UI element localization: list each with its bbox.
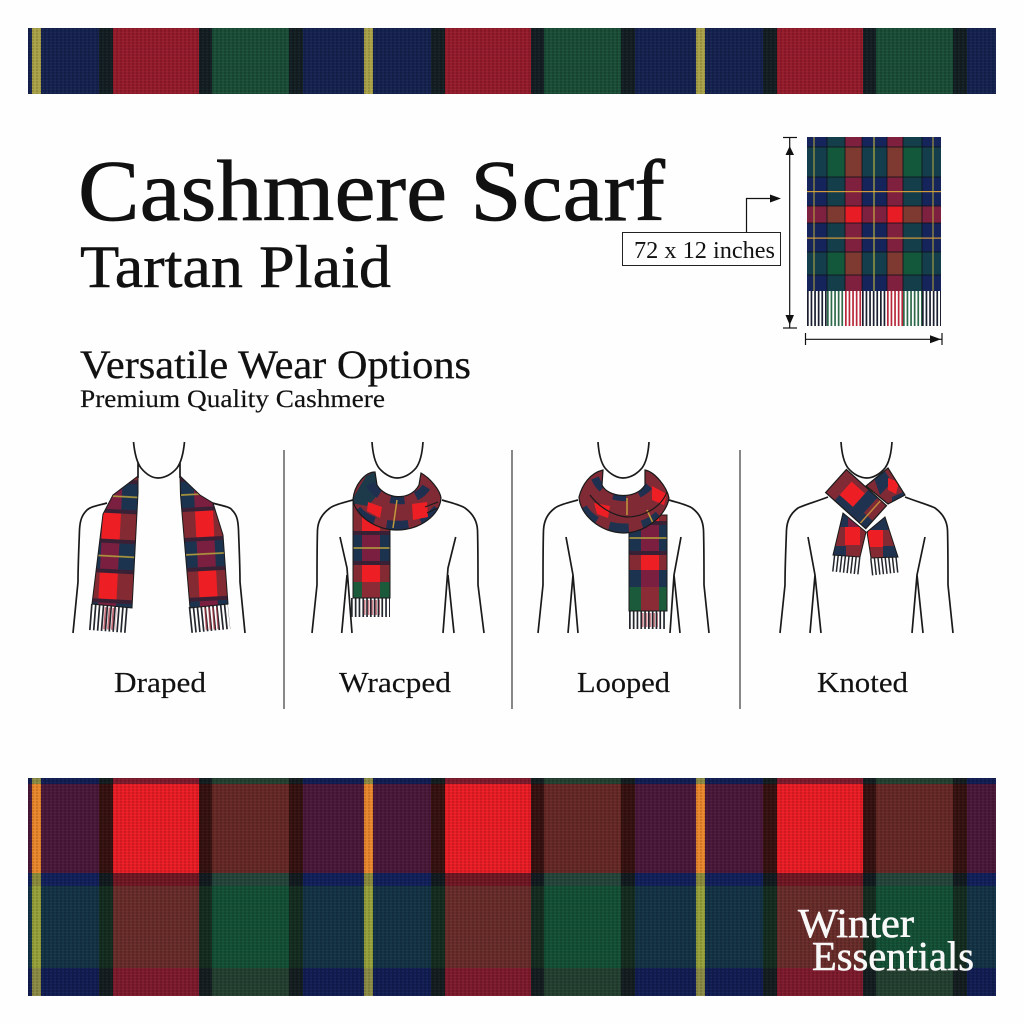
divider <box>283 450 285 709</box>
callout arrow <box>746 194 781 232</box>
panel: looped <box>538 442 709 633</box>
scarf hanging ends <box>832 512 899 558</box>
callout: size label: 72 x 12 inches <box>634 238 775 264</box>
label: Wracped: Wracped <box>339 667 452 699</box>
caption: Winter Essentials: Essentials <box>812 933 974 979</box>
scarf fringes <box>833 563 898 567</box>
scarf hanging end <box>353 498 390 598</box>
title: Cashmere Scarf <box>78 142 665 239</box>
scarf fringe <box>90 616 229 620</box>
figure outline <box>73 442 245 633</box>
scarf collar <box>352 471 442 531</box>
scarf left end <box>92 476 138 608</box>
figure outline <box>312 442 484 633</box>
label: Knotted: Knoted <box>817 667 909 699</box>
subtitle: Tartan Plaid <box>80 234 391 300</box>
scarf front band <box>826 469 887 529</box>
top tartan band <box>28 28 996 94</box>
scarf hanging end <box>629 515 667 611</box>
figure outline <box>538 442 709 633</box>
divider <box>739 450 741 709</box>
label: Draped: Draped <box>114 667 207 699</box>
width dimension arrow <box>806 333 942 345</box>
caption: Winter Essentials <box>798 900 974 979</box>
callout: size label <box>622 232 780 266</box>
scarf collar <box>578 469 670 534</box>
panel: knotted <box>780 442 953 633</box>
height dimension arrow <box>783 138 797 328</box>
label: Looped: Looped <box>577 667 671 699</box>
figure outline <box>780 442 953 633</box>
caption: Winter Essentials: Winter <box>798 900 914 946</box>
scarf fringe <box>807 291 941 326</box>
scarf right end <box>180 476 228 608</box>
panel: wrapped <box>312 442 484 633</box>
scarf fringe <box>629 611 667 629</box>
scarf back band <box>865 467 906 505</box>
section heading: Versatile Wear Options <box>80 342 471 387</box>
panel: draped <box>73 442 245 633</box>
panel: scarf dimensions diagram <box>622 137 942 345</box>
divider <box>511 450 513 709</box>
section subheading: Premium Quality Cashmere <box>80 386 385 413</box>
scarf fringe <box>351 598 390 617</box>
bottom tartan band <box>28 778 996 996</box>
scarf swatch <box>807 137 941 291</box>
